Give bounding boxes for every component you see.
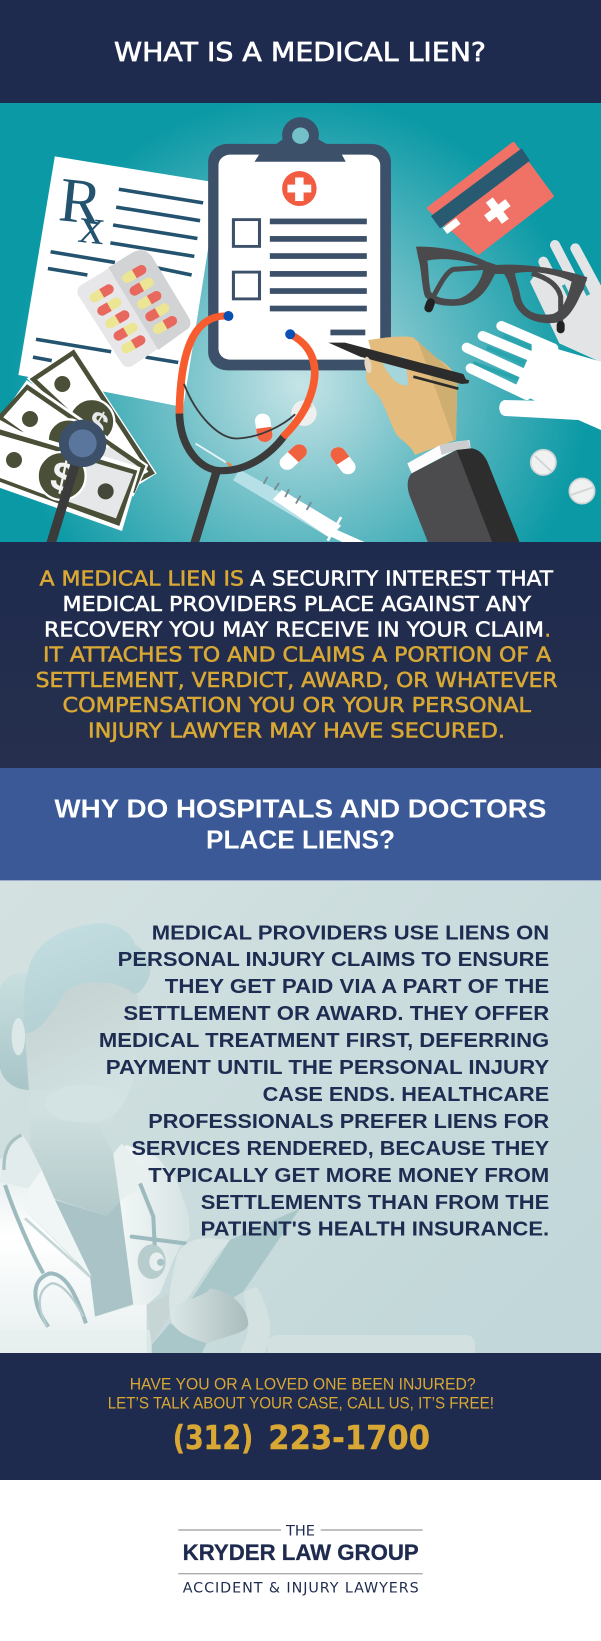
explanation paragraph: TYPICALLY GET MORE MONEY FROM (148, 1164, 549, 1187)
chest piece (50, 420, 106, 547)
credit card, glasses and gray glove (416, 144, 601, 363)
phone number (173, 1419, 430, 1457)
gray glove (530, 245, 601, 363)
money with stethoscope chest piece (0, 347, 157, 547)
intro paragraph: COMPENSATION YOU OR YOUR PERSONAL (62, 693, 532, 717)
lab coat (0, 1133, 190, 1357)
footer logo: ACCIDENT & INJURY LAWYERS (183, 1580, 419, 1596)
phone number: 223-1700 (268, 1419, 430, 1457)
stethoscope outline (4, 1135, 185, 1327)
call to action text: HAVE YOU OR A LOVED ONE BEEN INJURED? (130, 1375, 476, 1393)
intro paragraph: . (544, 617, 551, 641)
clipboard, pills, syringe and stethoscope (179, 117, 399, 557)
explanation paragraph: SETTLEMENTS THAN FROM THE (201, 1191, 549, 1214)
call to action text (108, 1375, 494, 1412)
intro paragraph: IT ATTACHES TO AND CLAIMS A PORTION OF A (43, 643, 551, 667)
intro paragraph: MEDICAL PROVIDERS PLACE AGAINST ANY (62, 592, 532, 616)
pill blister pack (85, 250, 190, 359)
syringe (195, 442, 364, 542)
money with stethoscope chest piece: $ (47, 451, 79, 502)
header band (0, 0, 601, 103)
explanation paragraph: PAYMENT UNTIL THE PERSONAL INJURY (106, 1056, 549, 1079)
explanation paragraph: MEDICAL PROVIDERS USE LIENS ON (152, 921, 549, 944)
stethoscope (179, 311, 315, 546)
title: WHAT IS A MEDICAL LIEN? (114, 38, 486, 68)
white glove (467, 326, 601, 431)
arm and tablet (147, 1208, 300, 1357)
explanation paragraph (99, 921, 549, 1241)
explanation paragraph: THEY GET PAID VIA A PART OF THE (165, 975, 549, 998)
prescription paper (18, 156, 218, 407)
explanation panel (0, 880, 601, 1359)
section heading band (0, 768, 601, 880)
Rx symbol: x (76, 197, 108, 256)
red cross badge (282, 171, 317, 206)
explanation paragraph: PERSONAL INJURY CLAIMS TO ENSURE (118, 948, 549, 971)
call to action text: LET’S TALK ABOUT YOUR CASE, CALL US, IT’S FREE! (108, 1394, 494, 1412)
Rx symbol and blister pack (56, 164, 190, 359)
clipboard (208, 117, 391, 370)
intro paragraph (36, 567, 558, 742)
loose capsules (254, 400, 359, 477)
explanation paragraph: SETTLEMENT OR AWARD. THEY OFFER (123, 1002, 549, 1025)
footer logo (0, 1480, 601, 1641)
money with stethoscope chest piece: $ (80, 404, 115, 445)
clipboard clip (255, 117, 346, 162)
intro paragraph: SETTLEMENT, VERDICT, AWARD, OR WHATEVER (36, 668, 558, 692)
hand, sleeve, white glove and tablets (328, 326, 601, 543)
Rx symbol (60, 179, 104, 244)
explanation paragraph: PROFESSIONALS PREFER LIENS FOR (148, 1110, 549, 1133)
section heading: PLACE LIENS? (206, 827, 395, 855)
explanation paragraph: PATIENT'S HEALTH INSURANCE. (200, 1218, 549, 1241)
hero illustration (0, 103, 601, 557)
explanation paragraph: CASE ENDS. HEALTHCARE (263, 1083, 549, 1106)
footer logo: KRYDER LAW GROUP (183, 1540, 419, 1565)
hand holding pen (328, 337, 469, 455)
section heading: WHY DO HOSPITALS AND DOCTORS (54, 795, 546, 823)
round tablets (531, 450, 595, 504)
intro text band (0, 542, 601, 768)
glasses (416, 247, 587, 329)
Rx symbol: R (56, 164, 106, 238)
intro paragraph: A MEDICAL LIEN IS (40, 567, 244, 591)
doctor body (0, 1134, 300, 1353)
explanation paragraph: SERVICES RENDERED, BECAUSE THEY (132, 1137, 549, 1160)
intro paragraph: A SECURITY INTEREST THAT (250, 567, 554, 591)
credit card (429, 144, 552, 253)
phone number: (312) (173, 1419, 253, 1457)
suit sleeve and cuff (407, 440, 520, 543)
doctor head (0, 924, 150, 1090)
section heading (54, 795, 546, 855)
explanation paragraph: MEDICAL TREATMENT FIRST, DEFERRING (99, 1029, 549, 1052)
footer logo: THE (285, 1524, 315, 1540)
call to action band (0, 1353, 601, 1480)
intro paragraph: INJURY LAWYER MAY HAVE SECURED. (88, 718, 505, 742)
intro paragraph: RECOVERY YOU MAY RECEIVE IN YOUR CLAIM (44, 617, 544, 641)
